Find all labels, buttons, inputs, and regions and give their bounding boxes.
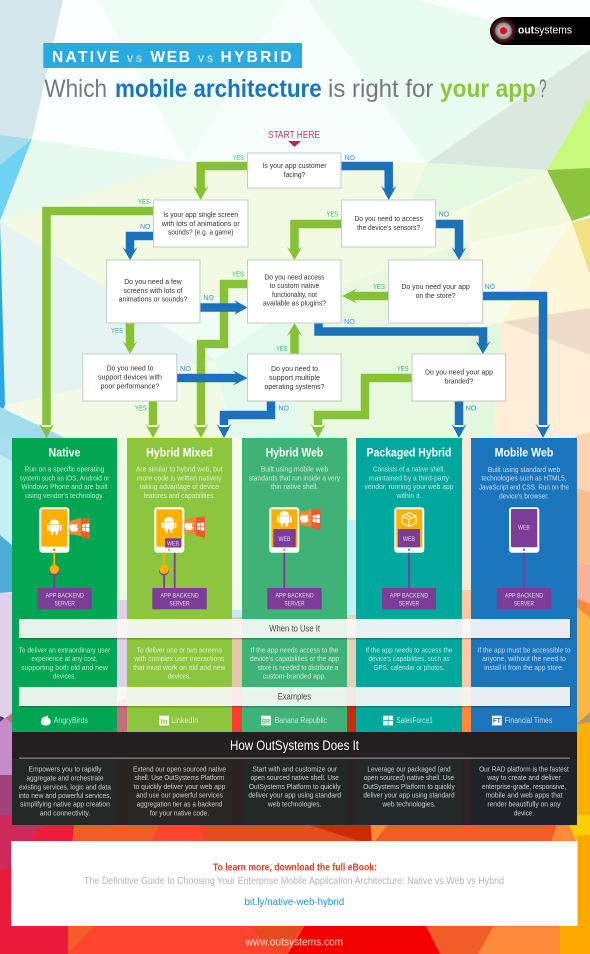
decision: branded: branded? (445, 377, 473, 386)
description: packaged hybrid: vendor, running your web app (364, 482, 454, 491)
when to use text: hybrid web: custom-branded app. (263, 672, 326, 681)
description: packaged hybrid (364, 464, 454, 500)
when to use text: packaged hybrid (366, 645, 452, 672)
yes and no labels: NO (485, 282, 495, 291)
yes and no labels: NO (278, 404, 289, 413)
text: mobile web: enterprise-grade, responsive, (482, 782, 566, 791)
text: packaged hybrid: open sourced) native shell. Use (364, 773, 454, 782)
yes and no labels: YES (232, 153, 244, 162)
arrow: sensors yes (287, 224, 342, 260)
description: hybrid web (249, 464, 340, 491)
when to use text: native: To deliver an extraordinary user (19, 645, 111, 654)
arrow: poor performance no (177, 370, 248, 386)
yes and no labels: YES (111, 326, 123, 335)
server box: packaged hybrid: SERVER (399, 600, 419, 607)
decision: few screens (106, 260, 200, 323)
arrow: sensors no (435, 224, 466, 260)
footer call to action (11, 841, 578, 926)
ebook heading: To learn more, download the full eBook: (213, 862, 377, 874)
example: LinkedIn: LinkedIn (171, 716, 198, 725)
text: mobile web: device. (514, 808, 534, 817)
description: mobile web: device's browser. (499, 492, 549, 501)
text: native: simplifying native app creation (20, 800, 110, 809)
arrow: on the store yes (342, 288, 389, 304)
yes and no labels: YES (138, 197, 150, 206)
text: hybrid mixed: to quickly deliver your web app (134, 782, 225, 791)
icon: hybrid mixed phone (154, 507, 205, 553)
yes and no labels: YES (135, 404, 147, 413)
title banner: vs (127, 51, 142, 65)
arrow: customer facing no (341, 166, 396, 200)
example: Financial Times: Financial Times (505, 716, 552, 725)
panel: packaged hybrid (356, 438, 462, 732)
example: Banana Republic: BR (262, 718, 270, 726)
yes and no labels: YES (373, 282, 385, 291)
server box: hybrid mixed (152, 588, 207, 609)
text: native: Empowers you to rapidly (28, 765, 102, 774)
server box: hybrid web: APP BACKEND (275, 593, 314, 600)
start here marker (268, 130, 320, 147)
text: mobile web: render beautifully on any (487, 799, 561, 808)
server box: mobile web: APP BACKEND (505, 593, 543, 600)
decision: multiple operating systems: Do you need to (271, 364, 318, 373)
headline: Which (44, 75, 107, 103)
description: mobile web: Built using standard web (488, 465, 560, 474)
decision: branded: Do you need your app (425, 368, 493, 377)
when to use text: hybrid web: store is needed to distribute a (258, 663, 339, 672)
decision: device sensors: the device's sensors? (357, 223, 420, 232)
description: native: system such as iOS, Android or (20, 473, 110, 482)
example: LinkedIn: in (160, 716, 168, 726)
when to use text: hybrid mixed: devices. (168, 672, 191, 681)
text: native (19, 765, 112, 818)
decision: single screen: with lots of animations or (161, 219, 240, 228)
decision: few screens: animations or sounds? (119, 295, 187, 304)
when to use text: native: devices. (53, 672, 76, 681)
text: mobile web: Our RAD platform is the fastest (479, 764, 569, 773)
arrow: few screens no (200, 300, 248, 315)
icon: packaged hybrid phone (394, 507, 424, 553)
connector: hybrid mixed to server (159, 553, 176, 588)
text: hybrid web: OutSystems Platform to quickly (249, 782, 341, 791)
yes and no labels: NO (180, 364, 191, 373)
example: Financial Times (492, 716, 552, 725)
text: native: into new and powerful services, (19, 791, 111, 800)
decision: customer facing: Is your app customer (262, 161, 327, 170)
logo: OutSystems: outsystems (518, 25, 572, 37)
example: LinkedIn (159, 716, 198, 726)
decision: device sensors: Do you need to access (354, 214, 423, 223)
yes and no labels: NO (204, 293, 214, 302)
arrow: customer facing yes (193, 166, 248, 200)
decision: custom native: Do you need access (264, 272, 325, 281)
headline: your app (440, 75, 536, 103)
logo: OutSystems (490, 17, 590, 45)
server box: hybrid web: SERVER (284, 600, 305, 607)
panel: hybrid web (242, 438, 347, 732)
text: packaged hybrid (363, 764, 455, 808)
title banner: vs (198, 51, 213, 65)
description: packaged hybrid: Consists of a native shell, (373, 464, 445, 474)
text: hybrid mixed: Extend our open sourced native (133, 764, 226, 773)
example: AngryBirds: AngryBirds (54, 716, 88, 725)
decision: multiple operating systems: support multiple (269, 373, 320, 382)
text: native: and connectivity. (40, 809, 90, 818)
description: native: Windows Phone and are built (21, 482, 108, 491)
description: hybrid mixed: features and capabilities. (143, 491, 215, 500)
text: native: existing services, logic and data (19, 782, 112, 791)
example: Banana Republic: Banana Republic (275, 716, 327, 725)
yes and no labels: NO (439, 210, 449, 219)
when to use text: packaged hybrid: device's capabilities, such as (368, 654, 450, 663)
server box: mobile web: SERVER (514, 600, 534, 607)
decision: customer facing (248, 153, 341, 188)
server box: packaged hybrid: APP BACKEND (390, 593, 428, 600)
when to use text: hybrid mixed: with complex user interactions (133, 654, 225, 663)
text: mobile web: way to create and deliver (486, 773, 561, 782)
when to use text: mobile web: If the app must be accessible to (478, 645, 570, 654)
yes and no labels: NO (140, 222, 151, 231)
icon: hybrid web phone (269, 507, 320, 553)
website url: www.outsystems.com (245, 937, 343, 949)
yes and no labels: NO (466, 404, 476, 413)
server box: hybrid mixed: SERVER (169, 600, 190, 607)
bar: examples: Examples (278, 691, 311, 701)
decision: on the store: Do you need your app (401, 282, 470, 291)
when to use text: mobile web: install it from the app store. (484, 663, 564, 672)
title banner: NATIVE (52, 49, 120, 66)
arrow: custom native no (318, 323, 490, 354)
description: mobile web (479, 465, 569, 501)
when to use text: hybrid web: If the app needs access to the (251, 645, 338, 654)
icon: native phone (39, 507, 90, 553)
arrow: poor performance yes (146, 401, 160, 438)
panel: hybrid mixed (127, 438, 232, 732)
bar: when to use it (19, 619, 571, 640)
text: packaged hybrid: Leverage our packaged (and (367, 764, 451, 773)
arrow: single screen yes to native (39, 211, 154, 438)
decision: poor performance: support devices with (98, 373, 162, 382)
decision: custom native (248, 260, 341, 323)
server box: hybrid mixed: APP BACKEND (160, 593, 199, 600)
headline (44, 75, 547, 103)
description: hybrid mixed: taking advantage of device (140, 482, 219, 491)
server box: native: SERVER (55, 600, 75, 607)
decision: custom native: available as plugins? (263, 299, 326, 308)
arrow: multiple os yes (287, 323, 302, 354)
description: mobile web: JavaScript and CSS. Run on the (479, 483, 569, 492)
text: hybrid web: Start with and customize our (252, 764, 338, 773)
server box: native: APP BACKEND (46, 593, 84, 600)
description: native: using vendor's technology. (25, 491, 104, 500)
text: packaged hybrid: OutSystems Platform to quickly (363, 782, 455, 791)
text: hybrid web: deliver your app using standard (248, 791, 341, 800)
start here marker: START HERE (268, 130, 320, 141)
icon: packaged hybrid phone: WEB (403, 536, 415, 543)
arrow: branded no (452, 401, 466, 438)
ebook title: The Definitive Guide to Choosing Your Enterprise Mobile Application Architecture: Native vs Web vs Hybrid (84, 875, 504, 887)
text: hybrid mixed (133, 764, 226, 817)
decision: single screen (154, 200, 248, 247)
arrow: custom native yes to hybrid mixed (194, 284, 248, 438)
decision: on the store (389, 260, 483, 323)
decision: few screens: screens with lots of (124, 286, 183, 295)
yes and no labels: YES (397, 364, 409, 373)
icon: hybrid mixed phone: WEB (167, 540, 179, 547)
panel: how outsystems does it (12, 732, 577, 825)
decision: poor performance (83, 354, 177, 401)
headline: is right for (328, 75, 433, 103)
ebook link: bit.ly/native-web-hybrid (244, 896, 344, 908)
heading: packaged hybrid: Packaged Hybrid (367, 446, 451, 460)
decision: single screen: sounds? (e.g. a game) (168, 228, 234, 237)
decision: custom native: functionality, not (272, 290, 318, 299)
example: AngryBirds (41, 715, 88, 726)
when to use text: native (19, 645, 111, 681)
heading: how outsystems does it: How OutSystems Does It (230, 738, 359, 753)
when to use text: hybrid web (250, 645, 339, 681)
decision: on the store: on the store? (416, 291, 456, 300)
description: hybrid mixed: more code is written natively (137, 473, 222, 482)
heading: hybrid web: Hybrid Web (266, 446, 323, 460)
text: native: aggregate and orchestrate (26, 773, 104, 782)
decision: customer facing: facing? (284, 170, 305, 179)
when to use text: hybrid mixed (133, 645, 226, 681)
example: SalesForce1: SalesForce1 (396, 716, 433, 725)
arrow: multiple os no (216, 401, 271, 438)
decision: device sensors (342, 200, 436, 247)
description: native (20, 464, 110, 500)
text: packaged hybrid: web technologies. (381, 799, 436, 808)
decision: single screen: Is your app single screen (163, 210, 238, 219)
text: hybrid mixed: and use our powerful services (136, 791, 223, 800)
icon: mobile web phone (509, 507, 539, 553)
yes and no labels: YES (232, 270, 244, 279)
text: hybrid web (248, 764, 341, 808)
decision: poor performance: Do you need to (106, 364, 154, 373)
arrow: single screen no (122, 236, 154, 260)
connector: native to server (49, 553, 59, 588)
yes and no labels (111, 153, 495, 413)
title banner: HYBRID (220, 49, 292, 66)
yes and no labels: NO (345, 153, 355, 162)
when to use text: packaged hybrid: If the app needs to access the (366, 645, 452, 654)
yes and no labels: NO (344, 317, 355, 326)
when to use text: packaged hybrid: GPS, calendar or photos. (374, 663, 444, 672)
description: hybrid web: standards that run inside a very (249, 473, 340, 482)
icon: hybrid web phone: WEB (278, 536, 290, 543)
decision: multiple operating systems (248, 354, 341, 401)
decision: few screens: Do you need a few (124, 277, 182, 286)
arrow: few screens yes (122, 323, 138, 354)
panel: native (12, 438, 117, 732)
server box: mobile web (497, 588, 551, 609)
text: hybrid mixed: for your native code. (150, 808, 209, 817)
when to use text: mobile web: anyone, without the need to (482, 654, 566, 663)
heading: hybrid mixed: Hybrid Mixed (146, 446, 213, 460)
decision: poor performance: poor performance? (101, 381, 159, 390)
text: hybrid web: open sourced native shell. Use (250, 773, 339, 782)
arrow: on the store no (482, 296, 550, 438)
example: SalesForce1 (383, 716, 433, 725)
description: hybrid mixed (136, 464, 223, 500)
decision: custom native: to custom native (270, 281, 319, 290)
description: packaged hybrid: maintained by a third-party (369, 473, 449, 482)
description: mobile web: technologies such as HTML5, (482, 474, 566, 483)
headline: mobile architecture (115, 75, 322, 103)
yes and no labels: YES (326, 210, 338, 219)
icon: mobile web phone: WEB (518, 525, 530, 532)
heading: mobile web: Mobile Web (495, 446, 553, 460)
server box: native (38, 588, 92, 609)
text: mobile web: mobile and web apps that (486, 791, 562, 800)
text: hybrid mixed: aggregation tier as a backend (137, 799, 222, 808)
text: packaged hybrid: deliver your app using standard (363, 791, 455, 800)
connector: packaged hybrid to server (408, 553, 410, 588)
flowchart (39, 153, 550, 438)
when to use text: hybrid web: device's capabilities or the app (250, 654, 339, 663)
bar: examples (19, 687, 571, 708)
description: hybrid web: Built using mobile web (261, 464, 328, 474)
text: hybrid web: web technologies. (267, 799, 322, 808)
when to use text: hybrid mixed: To deliver one or two screens (137, 645, 222, 654)
arrow: branded yes (310, 378, 412, 438)
decision: multiple operating systems: operating systems? (264, 382, 324, 391)
example: Financial Times: FT (493, 718, 501, 725)
panel: mobile web (471, 438, 577, 732)
when to use text: native: supporting both old and new (21, 663, 109, 672)
server box: hybrid web (267, 588, 322, 609)
title banner: WEB (150, 49, 190, 66)
heading: native: Native (48, 446, 81, 460)
bar: when to use it: When to Use It (269, 623, 320, 633)
yes and no labels: YES (276, 344, 288, 353)
description: hybrid mixed: Are similar to hybrid web, but (136, 464, 223, 474)
decision: branded (412, 354, 506, 401)
headline: ? (539, 75, 546, 103)
description: packaged hybrid: within it. (395, 491, 422, 500)
description: hybrid web: thin native shell. (271, 482, 318, 491)
server box: packaged hybrid (382, 588, 436, 609)
when to use text: hybrid mixed: that must work on old and new (133, 663, 226, 672)
text: mobile web (479, 764, 569, 817)
title banner (43, 43, 302, 68)
example: Banana Republic (261, 716, 327, 726)
description: native: Run on a specific operating (25, 464, 104, 474)
connector: mobile web to server (523, 553, 525, 588)
when to use text: native: experience at any cost, (31, 654, 98, 663)
text: hybrid mixed: shell. Use OutSystems Platform (135, 773, 224, 782)
connector: hybrid web to server (283, 553, 285, 588)
when to use text: mobile web (478, 645, 570, 672)
